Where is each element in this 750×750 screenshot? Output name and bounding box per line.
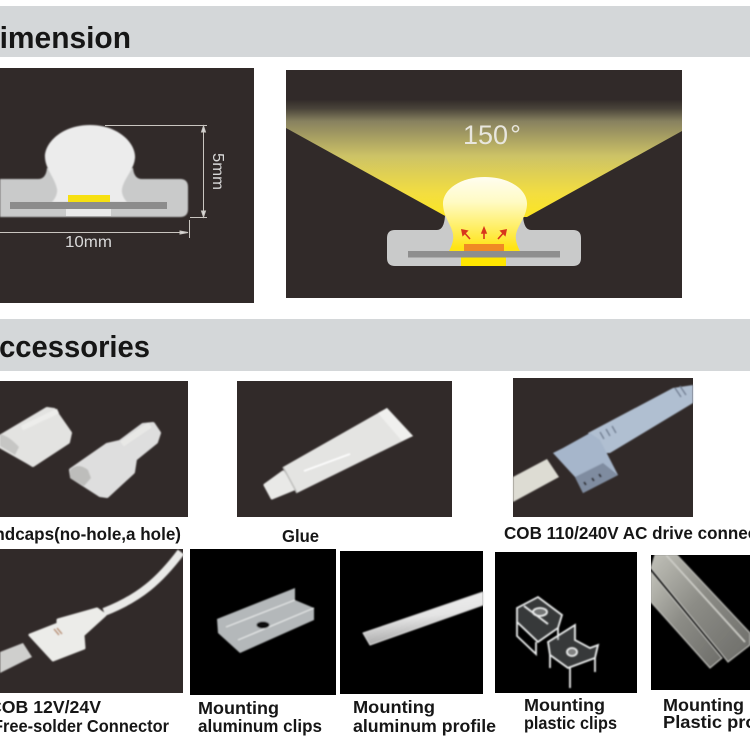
circuit board bar (10, 202, 167, 209)
label: 10mm: 10mm (65, 234, 112, 251)
LED chip (464, 244, 504, 251)
endcap with hole (70, 424, 159, 496)
aluminum clip (217, 588, 314, 653)
profile base (387, 216, 581, 266)
LED strip end (0, 643, 32, 673)
caption: aluminum clips: aluminum clips (198, 716, 322, 736)
caption: aluminum profile (353, 697, 496, 736)
caption: plastic clips (524, 695, 617, 733)
cable (104, 552, 181, 612)
no-hole endcap (0, 409, 70, 465)
connector body (30, 609, 105, 660)
profile base (0, 168, 188, 217)
caption: free-solder connector (0, 697, 169, 736)
caption: plastic clips: Mounting (524, 695, 605, 715)
panel: plastic profile photo (651, 555, 750, 690)
aluminum profile rod (363, 592, 483, 645)
label: 150 degrees: 150° (463, 120, 521, 150)
glowing dome (443, 177, 527, 251)
panel: endcaps photo (0, 381, 188, 517)
circuit board bar (408, 251, 560, 258)
panel: plastic clips photo (495, 552, 637, 693)
caption: plastic profile: Mounting (663, 695, 744, 715)
connector housing (588, 385, 693, 453)
light beam (286, 100, 682, 217)
bottom yellow slot (461, 258, 506, 266)
dimension lines (0, 126, 207, 238)
panel: glue tube photo (237, 381, 452, 517)
clear clip two (548, 625, 598, 688)
clear plastic profiles (651, 555, 750, 668)
panel: 150 degree beam angle (286, 70, 682, 298)
section header: Dimension (0, 6, 750, 57)
panel: aluminum profile photo (340, 551, 483, 694)
clear clip one (517, 597, 562, 654)
caption: aluminum profile: Mounting (353, 697, 435, 717)
connector head (553, 433, 618, 493)
bottom white slot (66, 209, 111, 216)
panel: AC drive connector photo (513, 378, 693, 517)
glue tube (265, 408, 413, 498)
panel: aluminum clip photo (190, 549, 336, 695)
caption: glue: Glue (282, 526, 319, 546)
panel: free-solder connector photo (0, 549, 183, 693)
caption: plastic clips: plastic clips (524, 713, 617, 733)
LED chip (68, 195, 110, 202)
LED strip end (513, 459, 559, 502)
caption: aluminum profile: aluminum profile (353, 716, 496, 736)
caption: aluminum clips: Mounting (198, 698, 279, 718)
section header: Accessories (0, 319, 750, 371)
light arrows (462, 228, 506, 239)
dome lens (45, 125, 135, 202)
caption: plastic profile (663, 695, 750, 732)
caption: aluminum clips (198, 698, 322, 736)
label: 5mm: 5mm (209, 153, 226, 190)
panel: cross-section with 10mm by 5mm dimensions (0, 68, 254, 303)
